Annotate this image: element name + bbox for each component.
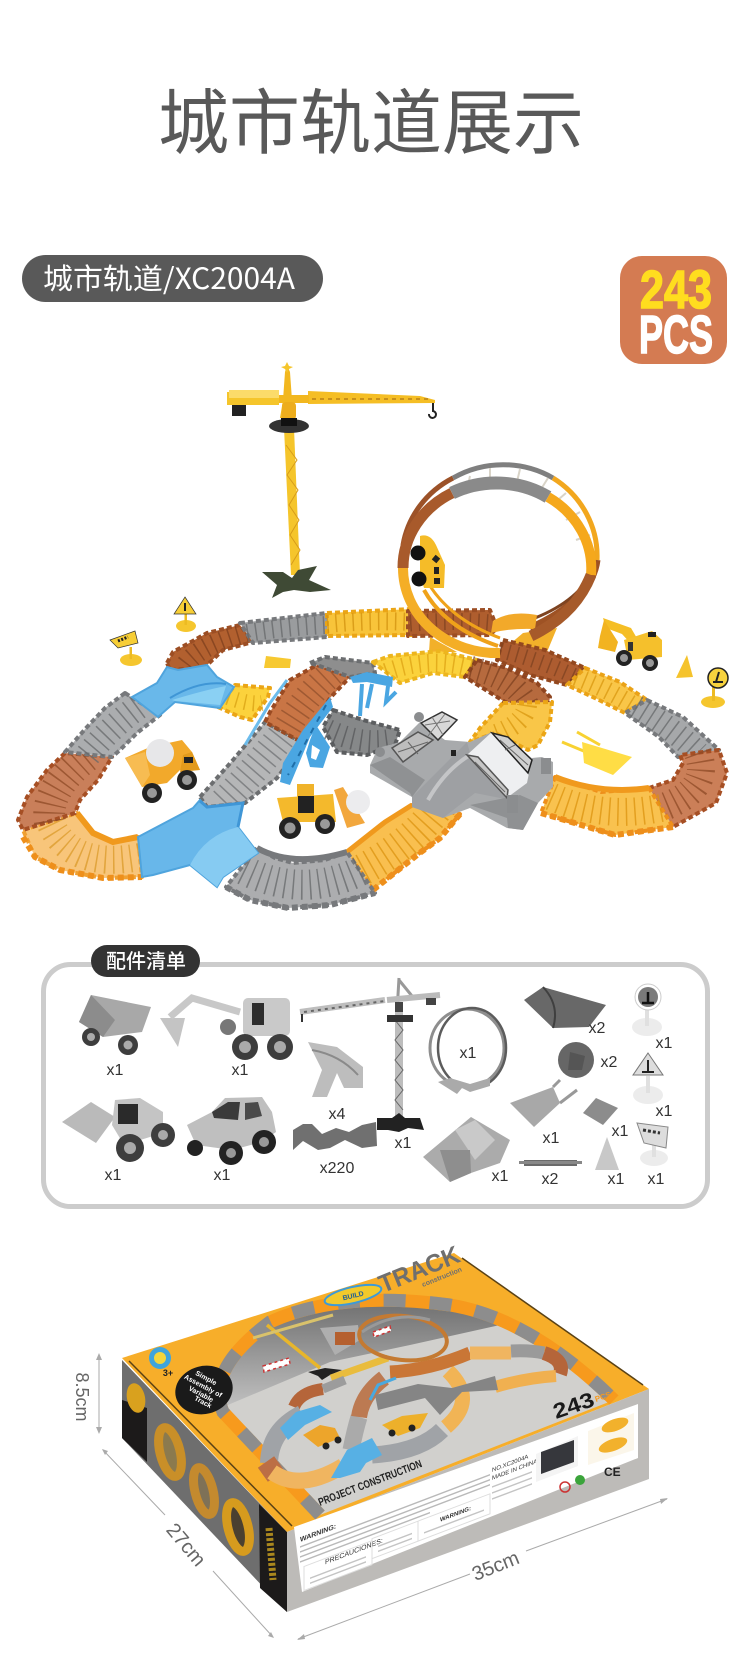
front warnings text: WARNING: [440, 1505, 471, 1524]
loop front ring [403, 483, 591, 653]
parts list tag: 配件清单 [106, 945, 186, 974]
part: loader: x1 [105, 1167, 122, 1184]
panel: parts list [44, 945, 708, 1206]
part: block: x1 [612, 1123, 629, 1140]
part: suv [187, 1097, 276, 1184]
model name pill: 城市轨道/XC2004A [43, 256, 295, 298]
blue junction upper [132, 665, 234, 717]
mini barriers [263, 1326, 391, 1372]
crane base [262, 566, 331, 598]
part: loader [62, 1098, 175, 1184]
part: cone: x1 [608, 1171, 625, 1188]
track: center crossing [200, 651, 552, 807]
part: arrow sign: x1 [648, 1171, 665, 1188]
loop back ring [403, 465, 597, 628]
product box [122, 1241, 649, 1612]
mini blue junctions [280, 1405, 382, 1478]
blue bridge near [245, 680, 333, 785]
title: 城市轨道展示 [158, 67, 584, 169]
part: dump truck: x1 [107, 1062, 124, 1079]
lid black seal: Variable [187, 1385, 214, 1404]
parts list tag [91, 945, 200, 977]
part: triangle sign: x1 [656, 1103, 673, 1120]
lid piece count [550, 1388, 613, 1424]
front toy thumbnails [536, 1413, 634, 1482]
dimension: width 35cm [297, 1498, 668, 1640]
part: curved bridge [308, 1042, 363, 1123]
lid black seal: Simple [194, 1370, 218, 1387]
mini track [266, 1312, 561, 1481]
lid back wall [219, 1300, 500, 1412]
box front face [287, 1389, 649, 1612]
mini gray station [375, 1376, 498, 1415]
lid brand mark: 3+ [163, 1368, 173, 1378]
dimension: depth 27cm [102, 1449, 274, 1638]
front warnings text: MADE IN CHINA [492, 1458, 538, 1482]
part: junction [524, 987, 606, 1037]
243 pcs badge: 243 [640, 260, 712, 320]
part: triangle sign [633, 1053, 673, 1120]
part: arrow sign [637, 1123, 668, 1188]
loop exit stub [491, 613, 537, 633]
front warnings text: NO.XC2004A [492, 1453, 529, 1474]
loop stand [429, 628, 557, 652]
part: rod: x2 [542, 1171, 559, 1188]
excavator toy [598, 618, 662, 671]
lid road band [219, 1300, 614, 1515]
lid brand mark [149, 1347, 173, 1378]
part: suv: x1 [214, 1167, 231, 1184]
part: work sign: x1 [656, 1035, 673, 1052]
243 pcs badge: PCS [639, 305, 713, 365]
gray bridge station [370, 712, 553, 830]
box top lid [122, 1241, 649, 1532]
part: dump truck [79, 995, 151, 1079]
part: station: x1 [492, 1168, 509, 1185]
part: track pieces: x220 [320, 1160, 354, 1177]
mini blue bridge [370, 1378, 396, 1400]
track: yellow link [218, 685, 270, 720]
part: junction: x2 [589, 1020, 606, 1037]
part: wheelbarrow [510, 1080, 577, 1147]
road sign arrows [110, 631, 142, 666]
front compliance icons: CE [604, 1465, 621, 1479]
lid ground scene [219, 1300, 614, 1515]
part: wheelbarrow: x1 [543, 1130, 560, 1147]
lid black seal [170, 1359, 238, 1421]
lid caption: PROJECT CONSTRUCTION [317, 1458, 424, 1509]
yellow car on loop [410, 535, 445, 588]
lid black seal: Assembly of [183, 1374, 223, 1400]
part: excavator: x1 [232, 1062, 249, 1079]
dimension: height 8.5cm: 8.5cm [72, 1372, 92, 1422]
traffic cone [676, 655, 693, 678]
mini bulldozer [382, 1413, 428, 1436]
dump truck toy [125, 739, 200, 803]
wheelbarrow [562, 732, 632, 775]
lid subtitle: construction [421, 1266, 463, 1289]
part: station [423, 1117, 510, 1185]
front warnings text [300, 1445, 538, 1592]
lid piece count: 243 [550, 1388, 597, 1424]
part: curved bridge: x4 [329, 1106, 346, 1123]
dimension: depth 27cm: 27cm [161, 1519, 210, 1571]
mini dump truck [303, 1425, 342, 1450]
lid piece count: PCS [594, 1390, 613, 1404]
front compliance icons [560, 1465, 621, 1492]
lid logo [323, 1281, 383, 1309]
lid black seal: Track [193, 1395, 213, 1410]
part: loop ring [430, 1008, 506, 1094]
track: right outer run [497, 640, 727, 835]
part: cone [595, 1137, 625, 1188]
box left side [122, 1360, 287, 1612]
part: track pieces [293, 1122, 377, 1177]
dimension: height 8.5cm [72, 1353, 102, 1434]
part: tower crane: x1 [395, 1135, 412, 1152]
track: lower yellow run [347, 805, 460, 890]
lid TRACK wordmark: TRACK [375, 1241, 464, 1299]
lid logo: BUILD [342, 1291, 365, 1302]
part: boulder: x2 [601, 1054, 618, 1071]
243 pcs badge [620, 256, 727, 365]
track: left outer run [18, 693, 160, 878]
part: loop ring: x1 [460, 1045, 477, 1062]
front warnings text: PRECAUCIONES: [325, 1536, 383, 1566]
yellow block [264, 656, 291, 668]
track: upper outer back run [167, 609, 497, 670]
part: rod [519, 1160, 582, 1188]
lid road dashes [219, 1300, 614, 1515]
front warnings text: WARNING: [300, 1522, 336, 1544]
road sign triangle [174, 597, 196, 632]
blue junction lower [138, 800, 258, 887]
dimension: width 35cm: 35cm [469, 1547, 523, 1586]
road sign right [701, 668, 728, 708]
bulldozer toy [277, 784, 370, 839]
blue bridge far [350, 672, 396, 716]
part: excavator [160, 998, 293, 1079]
part: boulder [558, 1042, 618, 1078]
part: work sign [632, 984, 673, 1052]
track: gray ramp [323, 710, 400, 755]
part: block [583, 1098, 629, 1140]
part: tower crane [300, 978, 440, 1152]
track: lower gray run [226, 848, 375, 908]
tower crane [227, 362, 436, 575]
mini crane [253, 1315, 360, 1380]
